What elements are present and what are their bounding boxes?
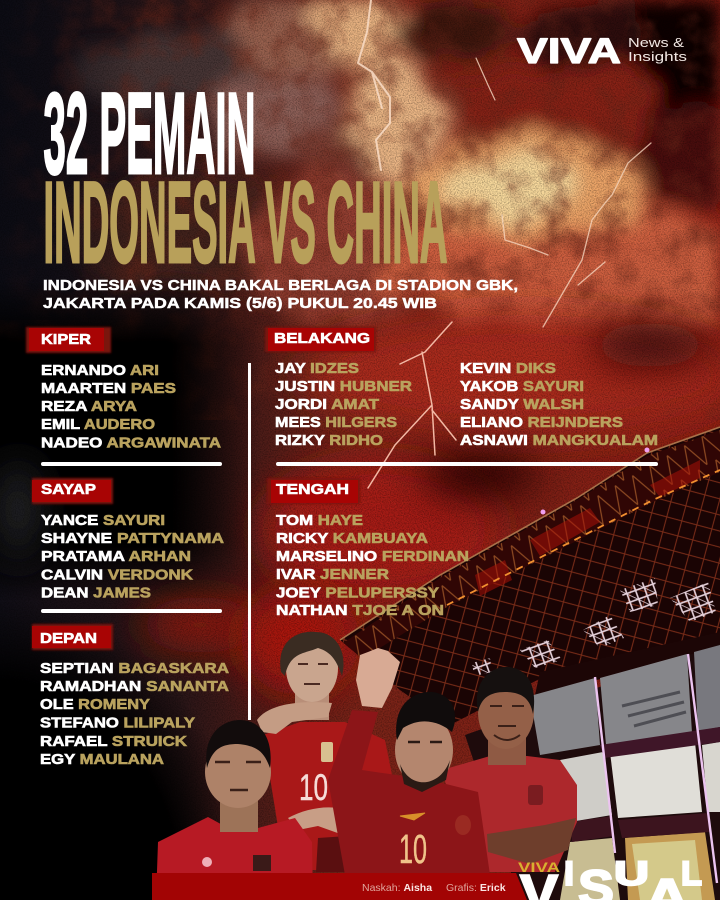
panel: sayap: YANCE SAYURI [41,513,165,529]
player 1: back centre, number 10 [257,632,395,872]
credits: Naskah: Aisha [362,882,432,894]
panel: tengah: TENGAH [276,482,349,498]
panel: belakang: JUSTIN HUBNER [275,379,413,395]
panel: tengah: NATHAN TJOE A ON [276,603,444,619]
logo: VIVA Visual [518,855,702,900]
column divider [248,363,251,720]
panel: depan: STEFANO LILIPALY [40,716,196,732]
logo: VIVA News & Insights [517,32,687,71]
subtitle: JAKARTA PADA KAMIS (5/6) PUKUL 20.45 WIB [43,296,437,312]
panel: sayap: PRATAMA ARHAN [41,549,191,565]
credit bar: Grafis: Erick [446,882,506,894]
lightning bolts [358,0,651,488]
logo: VIVA News & Insights: VIVA [517,32,621,71]
panel: depan: SEPTIAN BAGASKARA [40,661,229,677]
logo: VIVA Visual: I [564,855,574,893]
title [44,70,448,287]
panel: tengah: RICKY KAMBUAYA [276,531,428,547]
panel: belakang [265,327,658,449]
panel: tengah: JOEY PELUPERSSY [276,586,440,602]
panel: belakang: BELAKANG [274,331,370,347]
panel: sayap [32,478,224,602]
title: 32 PEMAIN [44,70,256,198]
panel: belakang: ASNAWI MANGKUALAM [460,433,658,449]
player 3: centre, waving [328,648,490,875]
subtitle: INDONESIA VS CHINA BAKAL BERLAGA DI STADION GBK, [43,278,518,294]
panel: kiper: NADEO ARGAWINATA [41,436,221,452]
logo: VIVA News & Insights: Insights [628,50,687,64]
panel: belakang: YAKOB SAYURI [460,379,584,395]
jersey number: 10 [399,826,427,872]
panel: kiper: ERNANDO ARI [41,363,159,379]
panel: belakang: MEES HILGERS [275,415,397,431]
player 2: front left [156,720,313,900]
panel: kiper: REZA ARYA [41,399,137,415]
logo: VIVA Visual: VIVA [518,859,560,875]
stadium facade [465,644,720,900]
stadium roof truss [340,427,720,725]
panel: kiper: KIPER [41,332,92,348]
panel: sayap: SAYAP [41,482,96,498]
panel: tengah: TOM HAYE [276,513,363,529]
panel: belakang: ELIANO REIJNDERS [460,415,623,431]
player 4: right, arms crossed [442,667,577,872]
logo: VIVA Visual: U [614,855,649,893]
panel: belakang: JAY IDZES [275,361,359,377]
panel: kiper: MAARTEN PAES [41,381,176,397]
panel: belakang: RIZKY RIDHO [275,433,383,449]
panel: tengah: MARSELINO FERDINAN [276,549,469,565]
panel: belakang: JORDI AMAT [275,397,379,413]
panel: belakang: KEVIN DIKS [460,361,556,377]
jersey number: 10 [299,767,328,808]
logo: VIVA Visual: L [681,855,702,893]
panel: depan: EGY MAULANA [40,752,164,768]
panel: belakang: SANDY WALSH [460,397,584,413]
subtitle [43,278,518,312]
panel: depan: RAMADHAN SANANTA [40,679,229,695]
panel: depan [32,624,229,768]
credit bar [152,873,527,900]
panel: kiper [26,327,221,452]
panel: tengah: IVAR JENNER [276,567,390,583]
panel: kiper: EMIL AUDERO [41,417,155,433]
panel: depan: RAFAEL STRUICK [40,734,188,750]
panel: tengah [267,478,469,619]
panel: sayap: SHAYNE PATTYNAMA [41,531,224,547]
panel: sayap: DEAN JAMES [41,586,151,602]
panel: sayap: CALVIN VERDONK [41,568,194,584]
panel: depan: DEPAN [40,631,97,647]
panel: depan: OLE ROMENY [40,697,151,713]
logo: VIVA News & Insights: News & [628,36,685,50]
left dark areas [0,0,140,320]
